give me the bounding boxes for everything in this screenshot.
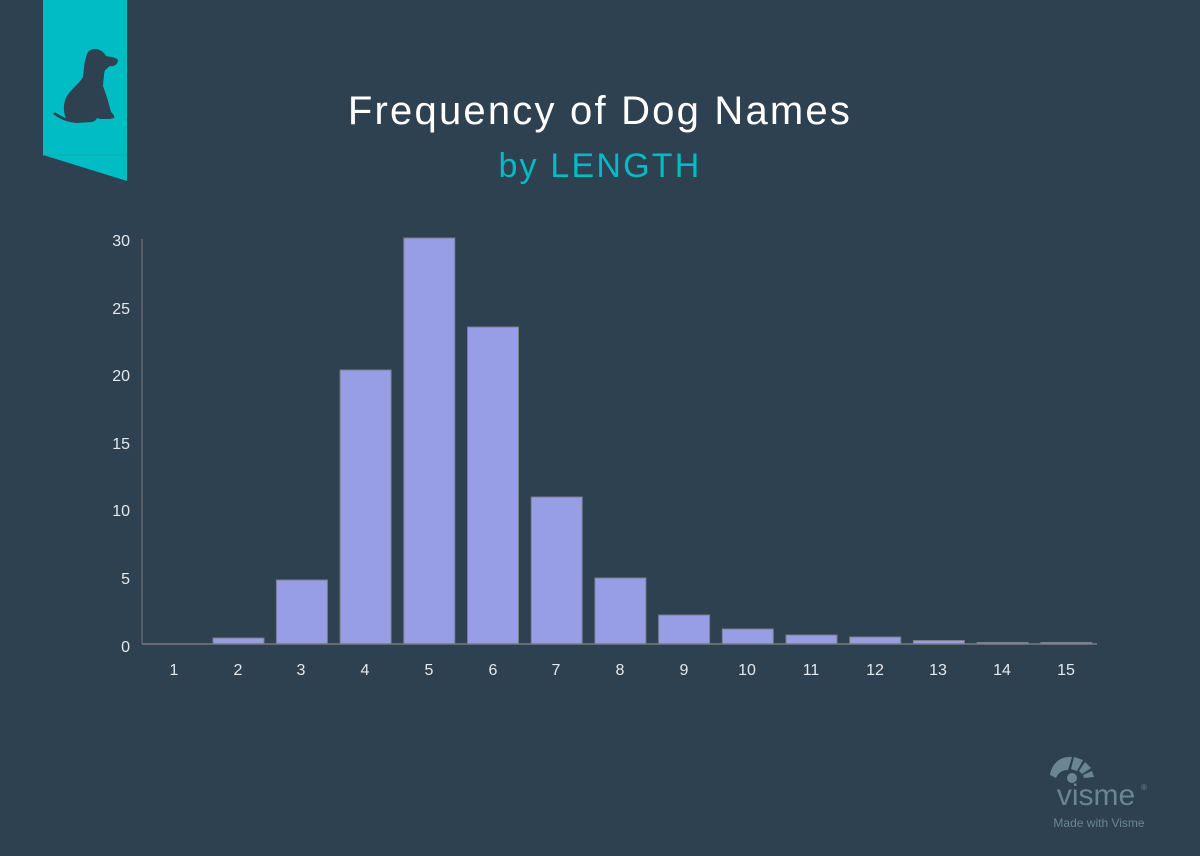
- visme logo: ®: [1141, 783, 1147, 792]
- visme logo: visme: [1057, 779, 1135, 812]
- y axis labels: 15: [112, 436, 130, 453]
- bar chart: [112, 233, 1097, 679]
- x axis labels: 1: [170, 662, 179, 679]
- y axis labels: 30: [112, 233, 130, 250]
- y axis labels: [112, 233, 130, 656]
- icon: dog: [53, 49, 118, 123]
- x axis labels: 13: [929, 662, 947, 679]
- y axis labels: 10: [112, 503, 130, 520]
- bars: [213, 238, 1092, 644]
- x axis labels: 2: [234, 662, 243, 679]
- x axis labels: [170, 662, 1075, 679]
- title: Frequency of Dog Names: [348, 89, 852, 133]
- x axis labels: 14: [993, 662, 1011, 679]
- x axis labels: 9: [680, 662, 689, 679]
- y axis labels: 0: [121, 639, 130, 656]
- y axis labels: 5: [121, 571, 130, 588]
- banner with dog icon: [43, 0, 127, 181]
- visme logo: [1050, 757, 1147, 830]
- x axis labels: 4: [361, 662, 370, 679]
- y axis labels: 25: [112, 301, 130, 318]
- visme logo: Made with Visme: [1053, 816, 1145, 830]
- subtitle: by LENGTH: [498, 147, 702, 185]
- x axis labels: 3: [297, 662, 306, 679]
- x axis labels: 15: [1057, 662, 1075, 679]
- x axis labels: 5: [425, 662, 434, 679]
- x axis labels: 7: [552, 662, 561, 679]
- x axis labels: 6: [489, 662, 498, 679]
- x axis labels: 12: [866, 662, 884, 679]
- y axis labels: 20: [112, 368, 130, 385]
- x axis labels: 11: [803, 662, 819, 679]
- x axis labels: 8: [616, 662, 625, 679]
- x axis labels: 10: [738, 662, 756, 679]
